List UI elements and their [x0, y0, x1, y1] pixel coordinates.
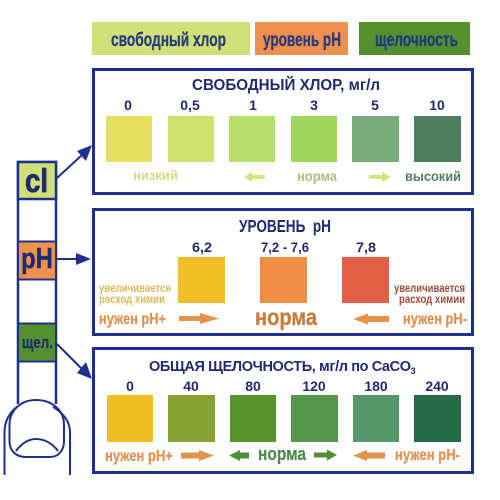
legend: pH level: уровень pH: [263, 30, 341, 51]
strip pad: cl: cl: [25, 162, 48, 199]
label: norm: норма: [258, 444, 307, 464]
note: right: увеличивается: [394, 281, 465, 295]
heading: total alkalinity: ОБЩАЯ ЩЕЛОЧНОСТЬ, мг/л по CaCO: [149, 359, 411, 375]
heading: free chlorine: СВОБОДНЫЙ ХЛОР, мг/л: [192, 75, 380, 94]
legend: alkalinity: щелочность: [375, 30, 458, 51]
label: norm: норма: [255, 304, 317, 330]
label: need pH minus: нужен pH-: [403, 311, 467, 328]
label: high: высокий: [405, 169, 461, 184]
note: left: расход химии: [99, 292, 165, 306]
scale values: 0: [126, 378, 134, 394]
note: left: увеличивается: [99, 281, 171, 295]
scale values: 7,2 - 7,6: [261, 239, 309, 255]
legend: pH level: [255, 22, 348, 55]
arrow: left: [244, 172, 265, 182]
panel: total alkalinity: [94, 348, 472, 472]
label: need pH plus: нужен pH+: [99, 311, 166, 328]
arrow: alkalinity to alkalinity panel: [57, 344, 92, 379]
arrow: right green: [314, 450, 337, 460]
panel: pH level: [94, 210, 472, 334]
legend: alkalinity: [359, 22, 470, 55]
label: low: низкий: [133, 168, 178, 183]
scale values: 120: [302, 378, 326, 394]
scale values: 3: [310, 97, 318, 113]
heading: pH level: УРОВЕНЬ pH: [239, 216, 331, 236]
arrow: right: [369, 172, 391, 182]
scale values: [124, 97, 445, 113]
arrow: pH to pH panel: [57, 253, 91, 265]
scale values: [126, 378, 449, 394]
test strip: [18, 162, 56, 404]
scale values: 5: [371, 97, 379, 113]
legend: free chlorine: свободный хлор: [111, 30, 226, 51]
colour swatches: [107, 395, 461, 442]
scale values: 6,2: [192, 239, 212, 255]
scale values: 80: [245, 378, 261, 394]
colour swatches: [106, 116, 461, 162]
scale values: 40: [183, 378, 199, 394]
strip pad: alkalinity: [18, 324, 56, 362]
icon: finger: [4, 400, 70, 475]
arrow: right: [179, 313, 219, 324]
arrow: right orange: [181, 450, 214, 461]
panel: free chlorine: [94, 70, 472, 194]
label: need pH plus: нужен pH+: [105, 448, 173, 465]
scale values: 1: [249, 97, 257, 113]
strip pad: alkalinity: щел.: [22, 333, 53, 352]
arrow: cl to chlorine panel: [57, 145, 92, 178]
legend: free chlorine: [92, 22, 250, 55]
heading: total alkalinity: 3: [411, 366, 416, 376]
scale values: 0: [124, 97, 132, 113]
arrow: left orange: [353, 450, 385, 461]
label: need pH minus: нужен pH-: [395, 447, 460, 464]
strip pad: pH: pH: [21, 243, 53, 275]
note: right: [394, 281, 465, 306]
scale values: [192, 239, 376, 255]
arrow: left green: [229, 450, 249, 461]
scale values: 240: [425, 378, 449, 394]
scale values: 7,8: [356, 239, 376, 255]
scale values: 0,5: [180, 97, 200, 113]
note: right: расход химии: [399, 292, 465, 306]
label: norm: норма: [297, 169, 337, 184]
colour swatches: [178, 257, 389, 303]
scale values: 180: [364, 378, 388, 394]
scale values: 10: [429, 97, 445, 113]
note: left: [99, 281, 171, 306]
arrow: left: [353, 314, 389, 324]
